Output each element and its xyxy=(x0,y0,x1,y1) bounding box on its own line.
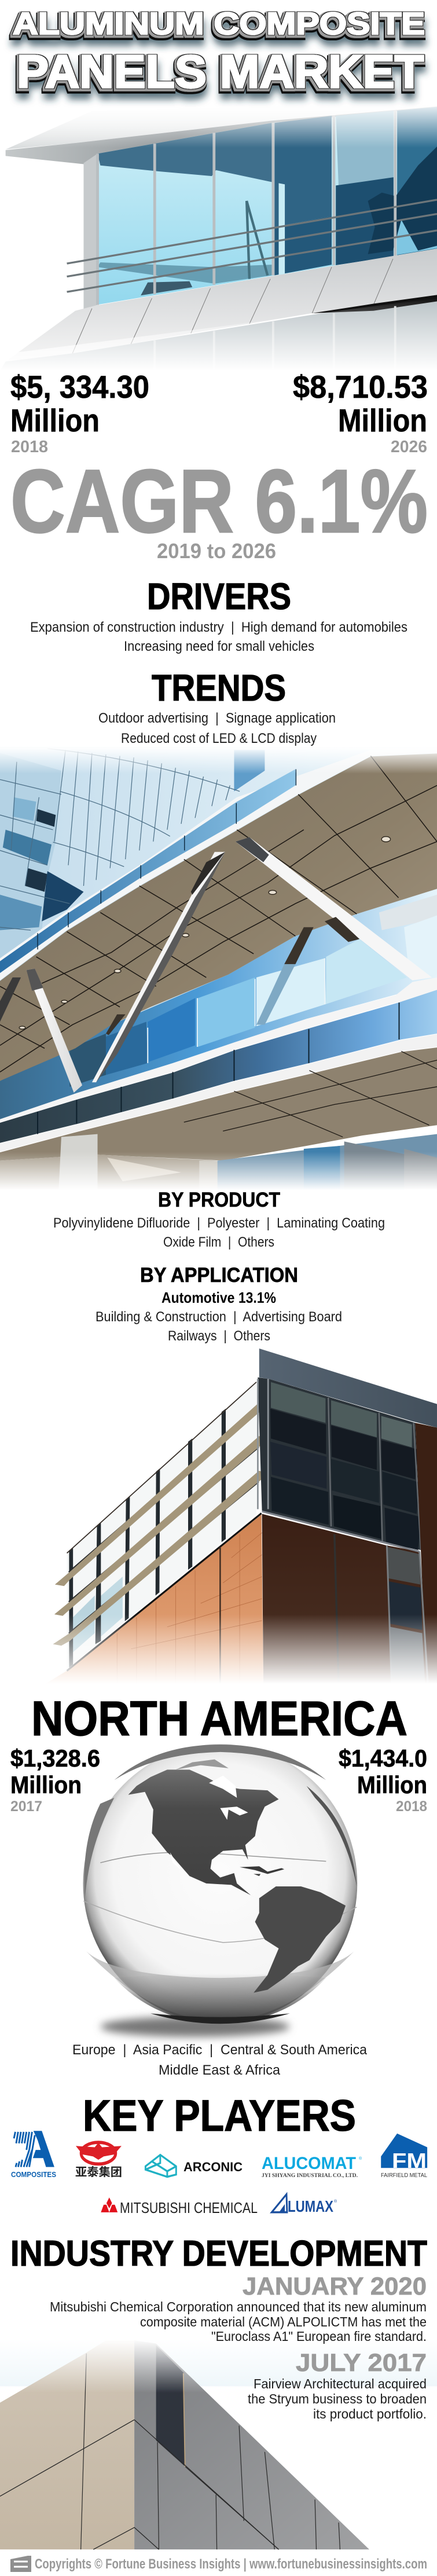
logo: Alumax xyxy=(271,2194,337,2215)
logo: Alumax: LUMAX xyxy=(288,2197,333,2215)
heading: north america: NORTH AMERICA xyxy=(31,1691,407,1746)
section: drivers: Expansion of construction industry | High demand for automobiles xyxy=(30,620,407,635)
stat: north america 2018: $1,434.0 xyxy=(339,1745,427,1772)
section: trends: TRENDS xyxy=(152,667,286,709)
development: january 2020: Mitsubishi Chemical Corporation announced that its new aluminum xyxy=(50,2299,427,2314)
stat: market value 2018: 2018 xyxy=(11,438,48,456)
logo: Mitsubishi Chemical xyxy=(101,2197,258,2216)
development: january 2020: JANUARY 2020 xyxy=(243,2273,427,2300)
photo: aluminum panel building corner xyxy=(0,2339,437,2549)
development: july 2017 xyxy=(248,2349,427,2421)
photo: building balcony with glass facade xyxy=(0,100,437,371)
section: drivers: DRIVERS xyxy=(147,576,291,617)
logo: Fairfield Metal xyxy=(381,2134,427,2179)
icon: fortune business insights logo xyxy=(10,2556,31,2572)
section: by product: BY PRODUCT xyxy=(158,1189,280,1211)
section: drivers xyxy=(30,576,407,654)
stat: north america 2018 xyxy=(339,1745,427,1815)
stat: north america 2017: $1,328.6 xyxy=(10,1745,100,1772)
stat: north america 2017: 2017 xyxy=(10,1798,42,1815)
logo: 3A Composites xyxy=(11,2131,56,2179)
text: trends second line: Reduced cost of LED & LCD display xyxy=(121,731,317,746)
logo: Mitsubishi Chemical: MITSUBISHI CHEMICAL xyxy=(120,2199,258,2216)
section: drivers: Increasing need for small vehicles xyxy=(124,639,314,654)
photo: glass skybridges xyxy=(0,747,437,1194)
text: other regions: Middle East & Africa xyxy=(159,2062,281,2078)
stat: market value 2026: $8,710.53 xyxy=(293,369,428,405)
development: january 2020 xyxy=(50,2273,427,2344)
stat: market value 2018: $5, 334.30 xyxy=(10,369,149,405)
section: by application: Building & Construction | Advertising Board xyxy=(96,1309,342,1325)
title xyxy=(13,6,425,97)
South America landmass xyxy=(254,1886,346,1993)
section: by application: BY APPLICATION xyxy=(140,1264,298,1287)
development: july 2017: the Stryum business to broaden xyxy=(248,2391,427,2406)
section: by product xyxy=(53,1189,385,1250)
stat: north america 2018: Million xyxy=(357,1771,427,1798)
development: july 2017: Fairview Architectural acquired xyxy=(254,2376,427,2391)
section: trends: Outdoor advertising | Signage application xyxy=(98,710,336,726)
logo: Fairfield Metal: FAIRFIELD METAL xyxy=(381,2172,427,2179)
logo: Fairfield Metal: FM xyxy=(392,2149,427,2172)
section: by application: Railways | Others xyxy=(168,1328,270,1344)
stat: CAGR: 2019 to 2026 xyxy=(157,539,276,563)
stat: north america 2017 xyxy=(10,1745,100,1815)
text: other regions xyxy=(72,2042,368,2078)
stat: market value 2026 xyxy=(293,369,428,456)
development: july 2017: its product portfolio. xyxy=(313,2406,427,2421)
logo: Arconic xyxy=(145,2155,243,2177)
title: ALUMINUM COMPOSITE xyxy=(13,6,425,41)
logo: Alucomat: JYI SHYANG INDUSTRIAL CO., LTD. xyxy=(262,2172,358,2178)
stat: market value 2018: Million xyxy=(10,402,100,438)
section: by product: Oxide Film | Others xyxy=(163,1234,274,1250)
text: other regions: Europe | Asia Pacific | Central & South America xyxy=(72,2042,368,2058)
logo: Arconic: ARCONIC xyxy=(183,2160,243,2174)
heading: key players: KEY PLAYERS xyxy=(83,2091,356,2141)
logo: Alumax: ® xyxy=(334,2199,337,2204)
stat: north america 2018: 2018 xyxy=(396,1798,427,1815)
logo: Yatai Group xyxy=(75,2142,122,2179)
logo: Alucomat: ALUCOMAT xyxy=(262,2154,356,2173)
development: january 2020: composite material (ACM) ALPOLICTM has met the xyxy=(140,2314,427,2329)
section: by application: Automotive 13.1% xyxy=(161,1289,276,1306)
development: july 2017: JULY 2017 xyxy=(296,2349,427,2377)
logo: Yatai Group: 亚泰集团 xyxy=(75,2165,122,2179)
title: PANELS MARKET xyxy=(17,46,424,97)
logo: Alucomat: ® xyxy=(359,2156,362,2161)
stat: north america 2017: Million xyxy=(10,1771,82,1798)
section: by product: Polyvinylidene Difluoride | Polyester | Laminating Coating xyxy=(53,1215,385,1231)
photo: brick and glass building corner xyxy=(0,1349,437,1688)
section: by application xyxy=(96,1264,342,1344)
North America landmass xyxy=(128,1769,279,1900)
logo: 3A Composites: COMPOSITES xyxy=(11,2170,56,2179)
section: trends xyxy=(98,667,336,726)
stat: market value 2018 xyxy=(10,369,149,456)
development: january 2020: "Euroclass A1" European fire standard. xyxy=(211,2329,427,2344)
stat: market value 2026: 2026 xyxy=(391,438,427,456)
stat: market value 2026: Million xyxy=(338,402,427,438)
icon: glass globe xyxy=(83,1744,357,2037)
